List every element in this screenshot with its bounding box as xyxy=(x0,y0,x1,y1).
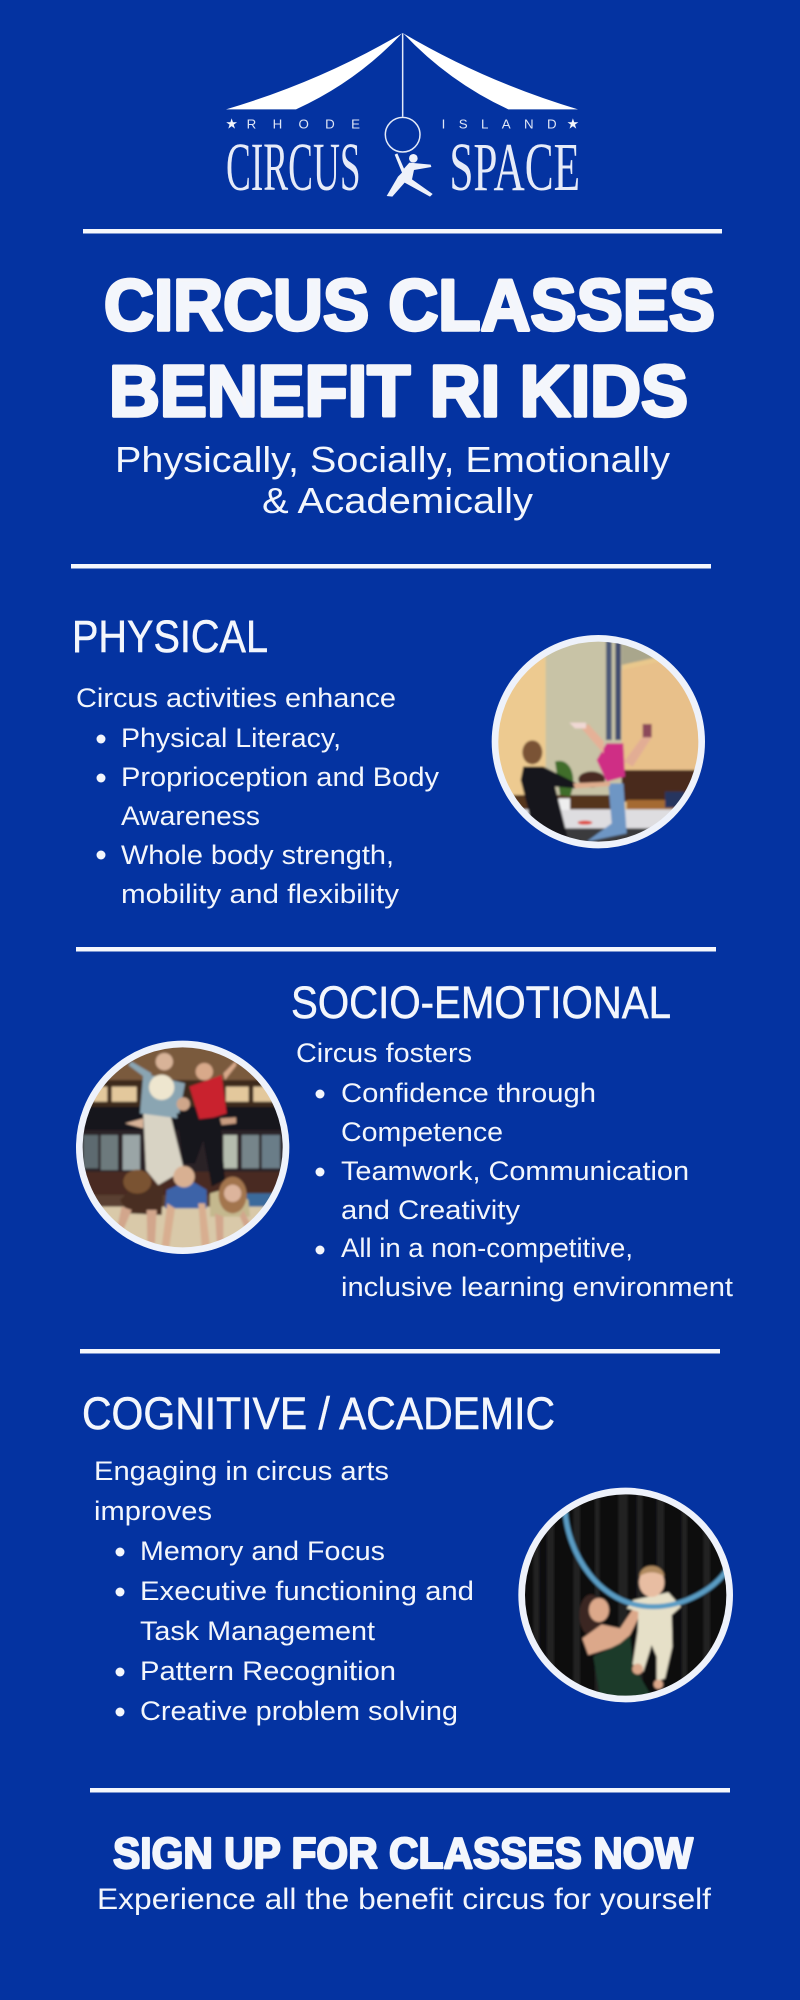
physical text block: Proprioception and Body xyxy=(121,762,440,792)
divider 2 xyxy=(71,564,711,568)
acrobat figure xyxy=(387,153,433,197)
cognitive text block: Task Management xyxy=(140,1616,376,1646)
socio-emotional text block: Confidence through xyxy=(341,1078,596,1108)
stars xyxy=(225,116,579,132)
title: BENEFIT RI KIDS xyxy=(109,352,688,432)
title xyxy=(104,266,715,432)
cognitive text block: Pattern Recognition xyxy=(140,1656,396,1686)
stars: ★ xyxy=(225,116,238,132)
divider 4 xyxy=(80,1349,720,1354)
divider 3 xyxy=(76,947,716,952)
physical text block: Whole body strength, xyxy=(121,840,394,870)
subtitle: & Academically xyxy=(262,480,533,521)
cognitive text block: Creative problem solving xyxy=(140,1696,458,1726)
divider 5 xyxy=(90,1788,730,1792)
tent roof xyxy=(226,33,578,109)
panel: cognitive / academic xyxy=(82,1388,745,1726)
subtitle xyxy=(115,439,670,521)
cognitive text block: Engaging in circus arts xyxy=(94,1456,389,1486)
sign-up heading: SIGN UP FOR CLASSES NOW xyxy=(113,1829,693,1878)
socio-emotional text block: Competence xyxy=(341,1117,503,1147)
CIRCUS SPACE wordmark: SPACE xyxy=(449,129,580,205)
aerial rope and hoop xyxy=(385,33,420,152)
logo: Rhode Island Circus Space xyxy=(225,33,580,205)
heading: cognitive / academic: COGNITIVE / ACADEMIC xyxy=(82,1388,555,1439)
RHODE ISLAND small caps: RHODE xyxy=(247,117,360,132)
subtitle: Physically, Socially, Emotionally xyxy=(115,439,670,480)
socio-emotional text block xyxy=(296,1038,734,1302)
sign-up subtext: Experience all the benefit circus for yourself xyxy=(97,1883,712,1916)
socio-emotional text block: and Creativity xyxy=(341,1195,521,1225)
CIRCUS SPACE wordmark: CIRCUS xyxy=(226,129,361,205)
panel: socio-emotional xyxy=(60,977,734,1302)
cognitive text block xyxy=(94,1456,474,1726)
physical text block: mobility and flexibility xyxy=(121,879,400,909)
photo: human pyramid xyxy=(76,1040,290,1254)
divider 1 xyxy=(83,229,722,234)
socio-emotional text block: Teamwork, Communication xyxy=(341,1156,689,1186)
RHODE ISLAND small caps: ISLAND xyxy=(442,117,557,132)
stars: ★ xyxy=(567,116,579,132)
photo: parent lifting baby through hoop xyxy=(518,1488,733,1702)
heading: physical: PHYSICAL xyxy=(72,611,268,662)
heading: socio-emotional: SOCIO-EMOTIONAL xyxy=(291,977,671,1028)
title: CIRCUS CLASSES xyxy=(104,266,715,346)
cognitive text block: improves xyxy=(94,1496,212,1526)
cognitive text block: Memory and Focus xyxy=(140,1536,385,1566)
physical text block: Awareness xyxy=(121,801,260,831)
physical text block xyxy=(76,683,440,909)
photo: aerial silks class xyxy=(492,635,705,848)
CIRCUS SPACE wordmark xyxy=(226,129,580,205)
cognitive text block: Executive functioning and xyxy=(140,1576,474,1606)
panel: physical xyxy=(72,611,720,909)
socio-emotional text block: Circus fosters xyxy=(296,1038,472,1068)
socio-emotional text block: inclusive learning environment xyxy=(341,1272,734,1302)
call to action xyxy=(97,1829,712,1916)
socio-emotional text block: All in a non-competitive, xyxy=(341,1233,633,1263)
physical text block: Circus activities enhance xyxy=(76,683,396,713)
physical text block: Physical Literacy, xyxy=(121,723,341,753)
RHODE ISLAND small caps xyxy=(247,117,557,132)
